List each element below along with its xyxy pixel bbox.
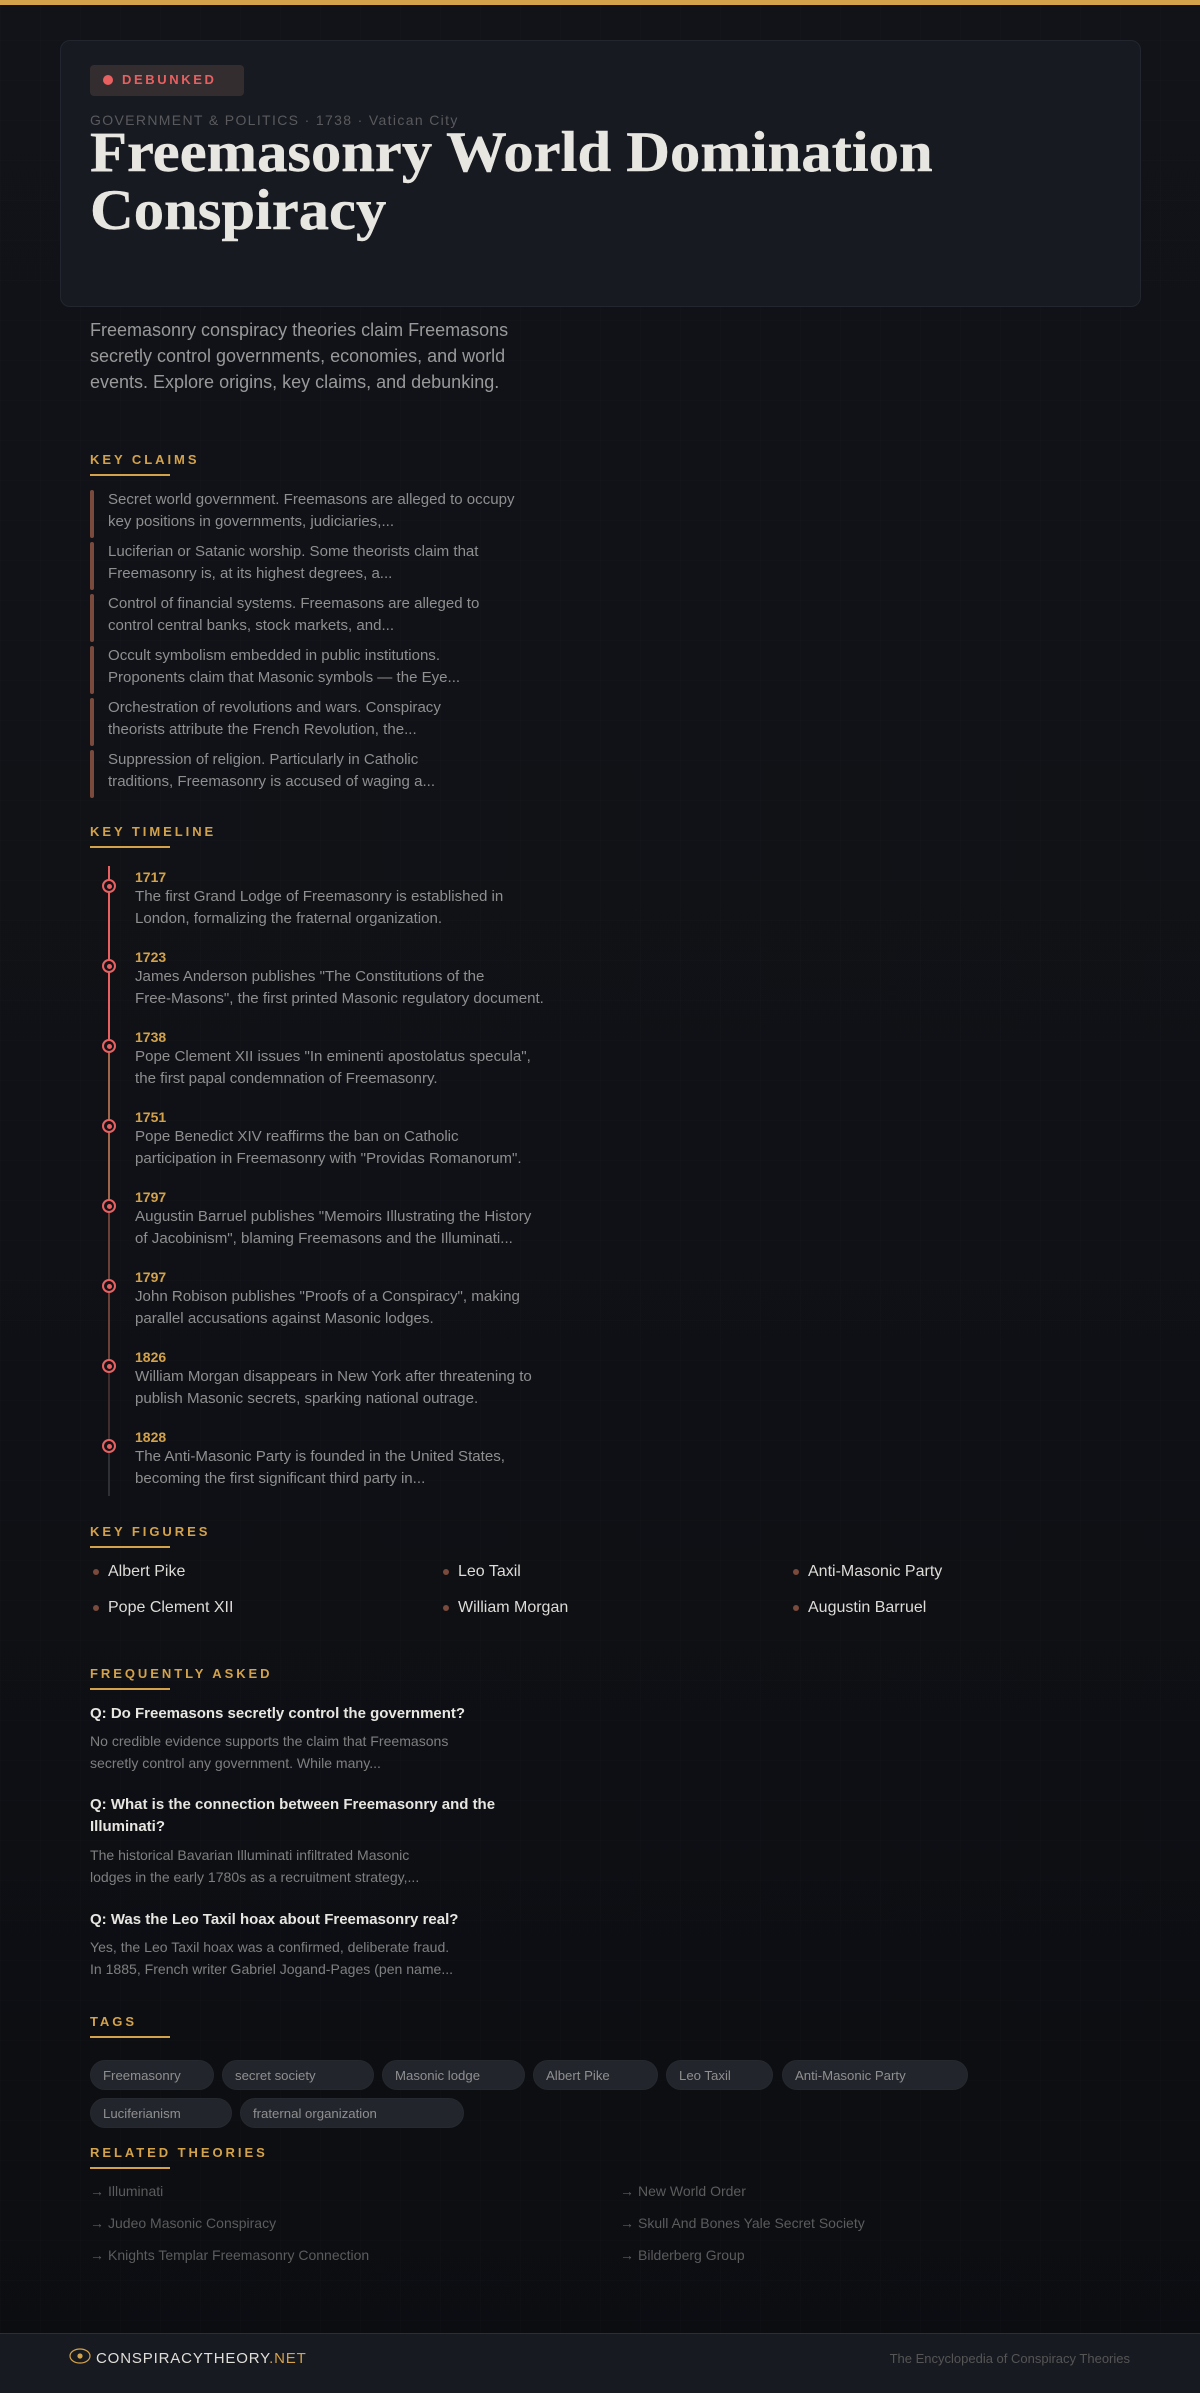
panel: key figures grid: Leo Taxil: [458, 1563, 521, 1580]
timeline event 1826: publish Masonic secrets, sparking national outrage.: [135, 1390, 478, 1407]
panel: tag pills: Masonic lodge: [395, 2068, 480, 2083]
FAQ 1: Q: Do Freemasons secretly control the government?: [90, 1705, 465, 1722]
timeline event 1826: 1826: [135, 1349, 166, 1365]
timeline event 1738: Pope Clement XII issues "In eminenti apostolatus specula",: [135, 1048, 531, 1065]
FAQ 3: [90, 1911, 458, 1977]
claim 4: Proponents claim that Masonic symbols — the Eye...: [108, 669, 460, 686]
panel: key figures grid: Albert Pike: [108, 1563, 185, 1580]
claim 3: Control of financial systems. Freemasons are alleged to: [108, 595, 479, 612]
intro text: [90, 320, 508, 392]
claim 2: Luciferian or Satanic worship. Some theorists claim that: [108, 543, 478, 560]
panel: hero header: [60, 40, 1141, 307]
timeline event 1751: Pope Benedict XIV reaffirms the ban on Catholic: [135, 1128, 459, 1145]
FAQ 1: secretly control any government. While many...: [90, 1755, 381, 1771]
panel: key figures grid: William Morgan: [458, 1599, 568, 1616]
timeline event 1751: 1751: [135, 1109, 166, 1125]
panel: related theories links: →: [620, 2215, 634, 2231]
status badge: debunked: [90, 65, 244, 96]
claim 6: Suppression of religion. Particularly in Catholic: [108, 751, 418, 768]
FAQ 3: Q: Was the Leo Taxil hoax about Freemasonry real?: [90, 1911, 458, 1928]
timeline event 1828: 1828: [135, 1429, 166, 1445]
claim 5: theorists attribute the French Revolution, the...: [108, 721, 417, 738]
title: Conspiracy: [90, 179, 386, 242]
FAQ 2: Illuminati?: [90, 1818, 165, 1835]
heading: key figures: KEY FIGURES: [90, 1524, 210, 1539]
timeline event 1723: James Anderson publishes "The Constitutions of the: [135, 968, 484, 985]
timeline event 1828: [135, 1429, 505, 1487]
timeline event 1797 Robison: 1797: [135, 1269, 166, 1285]
timeline event 1797 Barruel: Augustin Barruel publishes "Memoirs Illustrating the History: [135, 1208, 531, 1225]
panel: related theories links: →: [90, 2215, 104, 2231]
heading: key claims: KEY CLAIMS: [90, 452, 199, 467]
claim 4: [90, 646, 460, 694]
timeline line: [108, 866, 110, 1496]
claim 1: [90, 490, 514, 538]
timeline event 1797 Robison: [135, 1269, 520, 1327]
panel: related theories links: →: [90, 2183, 104, 2199]
FAQ 2: The historical Bavarian Illuminati infiltrated Masonic: [90, 1847, 409, 1863]
panel: key figures grid: [93, 1563, 942, 1616]
panel: related theories links: [90, 2183, 865, 2263]
panel: tag pills: Freemasonry: [103, 2068, 181, 2083]
claim 5: Orchestration of revolutions and wars. Conspiracy: [108, 699, 441, 716]
footer tagline: The Encyclopedia of Conspiracy Theories: [890, 2351, 1130, 2366]
timeline event 1723: Free-Masons", the first printed Masonic regulatory document.: [135, 990, 544, 1007]
claim 1: key positions in governments, judiciaries,...: [108, 513, 394, 530]
panel: tag pills: Luciferianism: [103, 2106, 181, 2121]
footer logo text: CONSPIRACYTHEORY.NET: [96, 2350, 307, 2367]
footer bar: [0, 2333, 1200, 2393]
timeline event 1738: [135, 1029, 531, 1087]
FAQ 3: In 1885, French writer Gabriel Jogand-Pages (pen name...: [90, 1961, 453, 1977]
heading: frequently asked: FREQUENTLY ASKED: [90, 1666, 273, 1681]
FAQ 2: lodges in the early 1780s as a recruitment strategy,...: [90, 1869, 419, 1885]
timeline event 1826: William Morgan disappears in New York after threatening to: [135, 1368, 532, 1385]
panel: related theories links: Judeo Masonic Conspiracy: [108, 2215, 276, 2231]
timeline event 1828: becoming the first significant third party in...: [135, 1470, 425, 1487]
claim 3: control central banks, stock markets, and...: [108, 617, 394, 634]
title: [90, 121, 933, 242]
title: Freemasonry World Domination: [90, 121, 933, 184]
panel: related theories links: →: [620, 2247, 634, 2263]
timeline event 1717: The first Grand Lodge of Freemasonry is established in: [135, 888, 503, 905]
panel: tag pills: fraternal organization: [253, 2106, 377, 2121]
status badge: debunked: DEBUNKED: [122, 72, 216, 87]
heading: key timeline: KEY TIMELINE: [90, 824, 216, 839]
panel: related theories links: Skull And Bones Yale Secret Society: [638, 2215, 865, 2231]
claim 6: [90, 750, 435, 798]
panel: key figures grid: Augustin Barruel: [808, 1599, 926, 1616]
timeline event 1738: the first papal condemnation of Freemasonry.: [135, 1070, 438, 1087]
timeline event 1828: The Anti-Masonic Party is founded in the United States,: [135, 1448, 505, 1465]
timeline event 1717: London, formalizing the fraternal organization.: [135, 910, 442, 927]
timeline event 1738: 1738: [135, 1029, 166, 1045]
timeline event 1797 Robison: parallel accusations against Masonic lodges.: [135, 1310, 434, 1327]
panel: tag pills: Anti-Masonic Party: [795, 2068, 906, 2083]
timeline event 1797 Barruel: of Jacobinism", blaming Freemasons and the Illuminati...: [135, 1230, 513, 1247]
panel: key figures grid: Pope Clement XII: [108, 1599, 233, 1616]
FAQ 1: [90, 1705, 465, 1771]
FAQ 1: No credible evidence supports the claim that Freemasons: [90, 1733, 448, 1749]
timeline event 1826: [135, 1349, 532, 1407]
category and date meta line: GOVERNMENT & POLITICS · 1738 · Vatican City: [90, 112, 459, 128]
heading: tags: TAGS: [90, 2014, 137, 2029]
panel: key figures grid: Anti-Masonic Party: [808, 1563, 942, 1580]
icon: eye logo: [69, 2348, 91, 2364]
intro text: Freemasonry conspiracy theories claim Freemasons: [90, 320, 508, 340]
FAQ 3: Yes, the Leo Taxil hoax was a confirmed, deliberate fraud.: [90, 1939, 449, 1955]
timeline event 1723: 1723: [135, 949, 166, 965]
FAQ 2: Q: What is the connection between Freemasonry and the: [90, 1796, 495, 1813]
claim 2: Freemasonry is, at its highest degrees, a...: [108, 565, 392, 582]
panel: related theories links: Bilderberg Group: [638, 2247, 745, 2263]
claim 2: [90, 542, 478, 590]
intro text: secretly control governments, economies, and world: [90, 346, 505, 366]
panel: related theories links: →: [620, 2183, 634, 2199]
panel: tag pills: secret society: [235, 2068, 316, 2083]
panel: tag pills: Leo Taxil: [679, 2068, 731, 2083]
claim 1: Secret world government. Freemasons are alleged to occupy: [108, 491, 514, 508]
timeline event 1797 Robison: John Robison publishes "Proofs of a Conspiracy", making: [135, 1288, 520, 1305]
timeline event 1723: [135, 949, 544, 1007]
intro text: events. Explore origins, key claims, and debunking.: [90, 372, 499, 392]
top accent bar: [0, 0, 1200, 5]
panel: related theories links: Knights Templar Freemasonry Connection: [108, 2247, 369, 2263]
timeline event 1797 Barruel: [135, 1189, 532, 1247]
timeline event 1751: participation in Freemasonry with "Providas Romanorum".: [135, 1150, 522, 1167]
timeline event 1717: [135, 869, 503, 927]
claim 5: [90, 698, 441, 746]
panel: related theories links: →: [90, 2247, 104, 2263]
timeline event 1797 Barruel: 1797: [135, 1189, 166, 1205]
heading: related theories: RELATED THEORIES: [90, 2145, 268, 2160]
claim 4: Occult symbolism embedded in public institutions.: [108, 647, 440, 664]
panel: related theories links: New World Order: [638, 2183, 746, 2199]
FAQ 2: [90, 1796, 495, 1885]
claim 3: [90, 594, 479, 642]
claim 6: traditions, Freemasonry is accused of waging a...: [108, 773, 435, 790]
panel: tag pills: [90, 2060, 968, 2128]
timeline event 1717: 1717: [135, 869, 166, 885]
panel: related theories links: Illuminati: [108, 2183, 163, 2199]
panel: key claims list: [90, 490, 514, 798]
timeline dots: [102, 879, 116, 1453]
timeline event 1751: [135, 1109, 522, 1167]
panel: tag pills: Albert Pike: [546, 2068, 610, 2083]
